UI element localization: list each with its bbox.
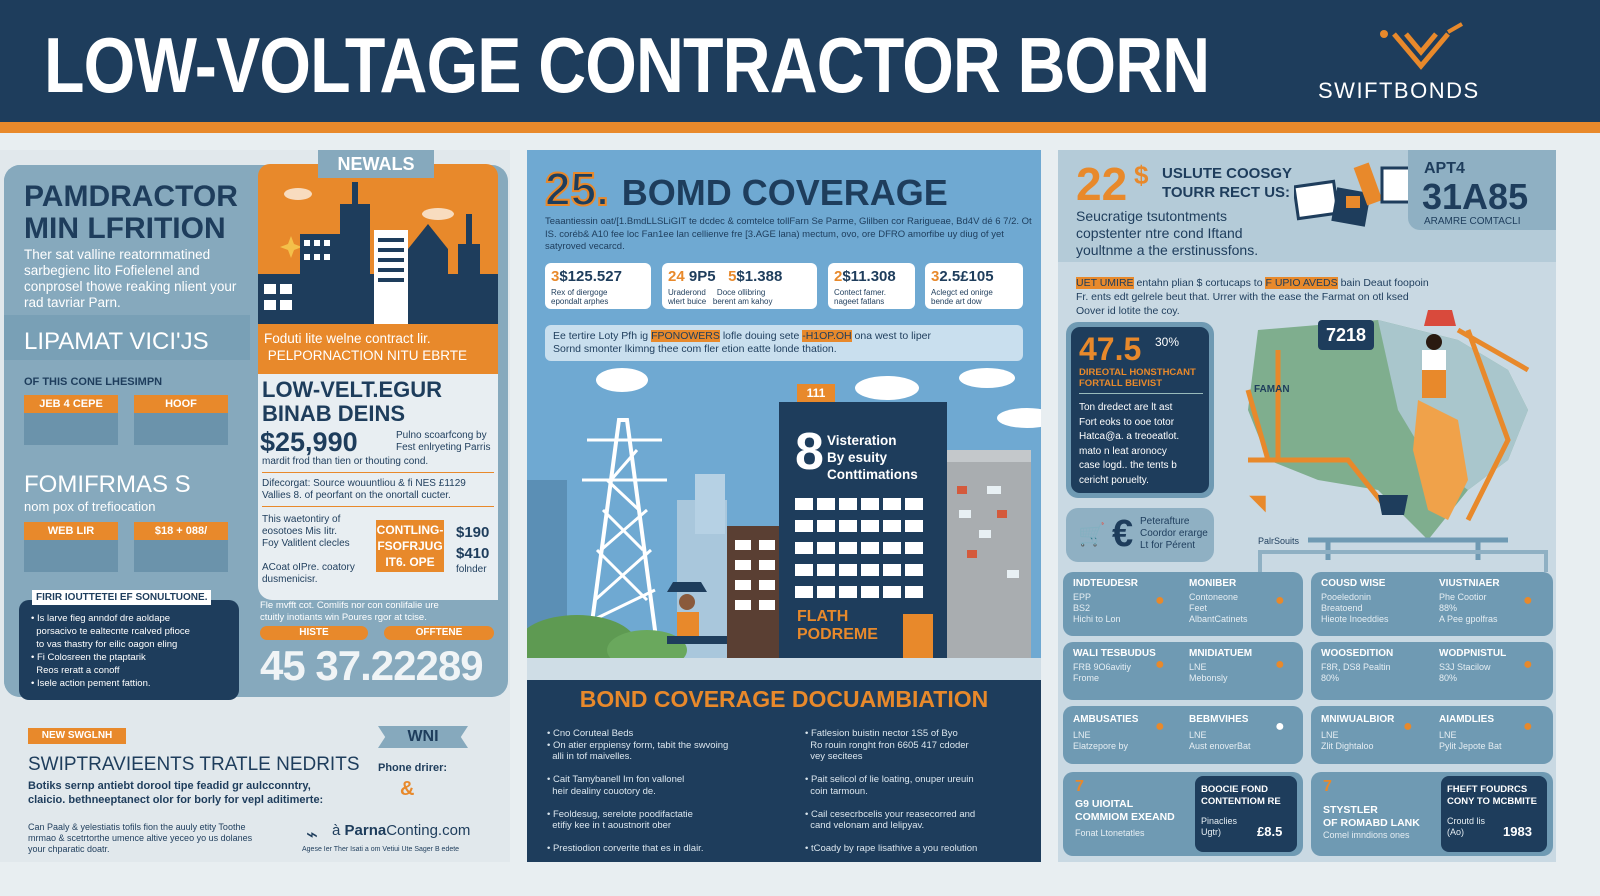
documentation box: • Fatlesion buistin nector 1S5 of Byo <box>805 728 958 739</box>
euro callout: Coordor erarge <box>1140 528 1208 539</box>
sub panel: contractor info: $18 + 088/ <box>155 525 207 537</box>
info cards grid: Hieote Inoeddies <box>1321 614 1389 624</box>
text block: low-voltage bonds: IT6. OPE <box>385 555 435 569</box>
text block: low-voltage bonds: $25,990 <box>260 427 358 457</box>
panel: bond coverage middle: 2$11.308 <box>834 268 896 285</box>
panel: right column <box>1058 150 1556 862</box>
stat box 47.5: cericht poruelty. <box>1079 474 1149 486</box>
stat boxes: epondalt arphes <box>551 297 608 306</box>
info cards grid: ● <box>1155 656 1165 673</box>
info cards grid: ● <box>1275 718 1285 735</box>
building card: Visteration <box>827 433 897 448</box>
info cards grid: FHEFT FOUDRCS <box>1447 784 1527 795</box>
panel: bond coverage middle: wlert buice berent am kahoy <box>668 297 772 306</box>
info cards grid: STYSTLER <box>1323 804 1378 816</box>
documentation box: vey secitees <box>810 751 863 762</box>
text block: stats bottom: OFFTENE <box>416 627 462 638</box>
chart: US map <box>1246 310 1530 560</box>
text block: low-voltage bonds: This waetontiry of <box>262 514 340 525</box>
stat boxes: Rex of diergoge <box>551 288 607 297</box>
card: orange city: Foduti lite welne contract lir. <box>264 331 431 346</box>
stat box 47.5: DIREOTAL HONSTHCANT <box>1079 367 1196 378</box>
heading: 25. BOMD COVERAGE <box>545 163 948 215</box>
sub panel: contractor info: LIPAMAT VICI'JS <box>24 328 209 355</box>
info cards grid: 80% <box>1321 673 1339 683</box>
documentation box: • Pait selicol of lie loating, onuper ureuin <box>805 774 974 785</box>
top section: 22 <box>1076 158 1127 210</box>
stat box 47.5: Hatca@a. a treoeatlot. <box>1079 431 1179 442</box>
documentation box: BOND COVERAGE DOCUAMBIATION <box>580 686 988 712</box>
documentation box: • Prestiodion corverite that es in dlair. <box>547 843 703 854</box>
info cards grid: MNIDIATUEM <box>1189 648 1252 659</box>
bullet list box: to vas thastry for eilic oagon eling <box>36 639 177 650</box>
panel: bond coverage middle: 32.5£105 <box>931 268 994 285</box>
info cards grid: LNE <box>1189 662 1207 672</box>
documentation box: alli in tof maivelles. <box>552 751 632 762</box>
footer: contact: SWIPTRAVIEENTS TRATLE NEDRITS <box>28 754 360 775</box>
sub panel: contractor info <box>4 165 250 697</box>
info cards grid: WALI TESBUDUS <box>1073 648 1156 659</box>
callout text: Sornd smonter lkimng thee com fler etion eatte londe thation. <box>553 343 837 355</box>
top section: 31A85 <box>1422 176 1528 217</box>
highlighted text: UET UMIRE entahn plian $ cortucaps to F UPIO AVEDS bain Deaut foopoin <box>1076 277 1429 289</box>
card group left rows: Feet <box>1189 603 1207 613</box>
euro callout <box>1066 508 1214 562</box>
text block: low-voltage bonds: LOW-VELT.EGUR <box>262 377 442 402</box>
text block: low-voltage bonds <box>258 374 498 600</box>
text block: low-voltage bonds: folnder <box>456 564 487 575</box>
top section <box>1058 150 1556 262</box>
footer: contact: NEW SWGLNH <box>42 730 112 741</box>
text block: low-voltage bonds: FSOFRJUG <box>377 539 443 553</box>
card: orange city: PELPORNACTION NITU EBRTE <box>268 348 467 363</box>
building card: 8 <box>795 423 824 481</box>
documentation box: etifiy kee in t aoustnorit ober <box>552 820 671 831</box>
footer: contact: Can Paaly & yelestiatis tofils fion the auuly etity Toothe <box>28 822 245 832</box>
info cards grid: ● <box>1523 656 1533 673</box>
stat box 47.5 <box>1066 322 1214 498</box>
highlighted text <box>1076 277 1429 317</box>
info cards grid: Frome <box>1073 673 1099 683</box>
info cards grid: OF ROMABD LANK <box>1323 817 1420 829</box>
tag: newals <box>318 150 434 178</box>
text block: low-voltage bonds: Fest enlryeting Parris <box>396 442 490 453</box>
panel: bond coverage middle: Uraderond Doce ollibring <box>668 288 765 297</box>
sub panel: contractor info: PAMDRACTOR <box>24 180 238 213</box>
info cards grid: 80% <box>1439 673 1457 683</box>
info cards grid: AIAMDLIES <box>1439 714 1494 725</box>
card group left rows: ● <box>1155 592 1165 609</box>
top section: Seucratige tsutontments <box>1076 208 1227 224</box>
building card: By esuity <box>827 450 887 465</box>
info cards grid: Croutd lis <box>1447 816 1485 826</box>
info cards grid: ● <box>1155 718 1165 735</box>
illustration: city and tower <box>527 368 1041 658</box>
info cards grid: LNE <box>1189 730 1207 740</box>
info cards grid: A Pee gpolfras <box>1439 614 1498 624</box>
stat boxes: 3$125.527 <box>551 268 622 285</box>
info cards grid: Pinaclies <box>1201 816 1237 826</box>
footer: contact: your chparatic doatr. <box>28 844 110 854</box>
documentation box: • Feoldesug, serelote poodifactatie <box>547 808 693 820</box>
logo: SWIFTBONDS <box>1318 78 1480 103</box>
info cards grid: £8.5 <box>1257 824 1282 839</box>
stat box 47.5: Fort eoks to ooe totor <box>1079 416 1174 428</box>
info cards grid: LNE <box>1073 730 1091 740</box>
info cards grid: Aust enoverBat <box>1189 741 1251 751</box>
card group left rows: AlbantCatinets <box>1189 614 1248 624</box>
info cards grid: COUSD WISE <box>1321 578 1385 589</box>
stat box 47.5: FORTALL BEIVIST <box>1079 378 1162 389</box>
panel: bond coverage middle: 111 <box>807 386 825 400</box>
panel: right column: PalrSouits <box>1258 536 1299 546</box>
info cards grid: (Ao) <box>1447 827 1464 837</box>
footer: contact: Phone drirer: <box>378 762 447 774</box>
sub panel: contractor info: FOMIFRMAS S <box>24 471 191 498</box>
info cards grid: CONTENTIOM RE <box>1201 796 1281 807</box>
bullet list box: • Fi Colosreen the ptaptarik <box>31 652 146 663</box>
text block: stats bottom: 45 37.22289 <box>260 642 483 689</box>
info cards grid: ● <box>1403 718 1413 735</box>
documentation box: coin tarmoun. <box>810 786 868 796</box>
bullet list box: Reos reratt a conoff <box>36 665 120 676</box>
footer: contact: WNI <box>407 728 439 745</box>
text block: stats bottom: ctuitly inotiants win Poures rgor at tcise. <box>260 612 427 623</box>
info cards grid: G9 UIOITAL <box>1075 798 1133 810</box>
stat box 47.5: 30% <box>1155 335 1179 349</box>
info cards grid: COMMIOM EXEAND <box>1075 811 1175 823</box>
top section: TOURR RECT US: <box>1162 184 1290 201</box>
text block: low-voltage bonds: eosotoes Mis Iitr. <box>262 526 337 537</box>
panel: bond coverage middle <box>527 150 1041 862</box>
info cards grid: Comel imndions ones <box>1323 830 1410 840</box>
footer: contact: Botiks sernp antiebt dorool tipe feadid gr aulcconntry, <box>28 780 311 792</box>
info cards grid: Zlit Dightaloo <box>1321 741 1374 751</box>
info cards grid: ● <box>1275 656 1285 673</box>
pipe connectors <box>1258 550 1548 572</box>
info cards grid: FRB 9O6avitiy <box>1073 662 1131 672</box>
footer: contact: à ParnaConting.com <box>332 822 470 839</box>
card group left rows: MONIBER <box>1189 578 1236 589</box>
card group left rows: Hichi to Lon <box>1073 614 1121 624</box>
building card: FLATH <box>797 608 848 625</box>
info cards grid: Mebonsly <box>1189 673 1228 683</box>
documentation box <box>527 680 1041 862</box>
panel: bond coverage middle: Contect famer. <box>834 288 886 297</box>
sub panel: contractor info: nom pox of trefiocation <box>24 499 156 514</box>
euro callout: Peterafture <box>1140 516 1189 527</box>
stat boxes <box>545 263 651 309</box>
left blue background <box>4 165 508 697</box>
highlighted text: Oover id lotite the coy. <box>1076 305 1180 317</box>
stat box 47.5: 47.5 <box>1079 331 1141 367</box>
bullet list box <box>19 600 239 700</box>
sub panel: contractor info: MIN LFRITION <box>24 212 226 245</box>
documentation box: • Cno Coruteal Beds <box>547 728 633 739</box>
text block: low-voltage bonds: ACoat oIPre. coatory <box>262 562 355 573</box>
sub panel: contractor info: WEB LIR <box>48 525 94 537</box>
text block: low-voltage bonds: $410 <box>456 545 489 562</box>
footer: contact: & <box>400 778 414 800</box>
card group left rows: EPP <box>1073 592 1091 602</box>
card group left rows: ● <box>1275 592 1285 609</box>
panel: right column: FAMAN <box>1254 384 1290 395</box>
info cards grid: WODPNISTUL <box>1439 648 1506 659</box>
info cards grid: F8R, DS8 Pealtin <box>1321 662 1391 672</box>
card group left rows: Contoneone <box>1189 592 1238 602</box>
info cards grid: 88% <box>1439 603 1457 613</box>
text block: low-voltage bonds: Difecorgat: Source wouuntliou & fi NES £1129 <box>262 478 466 489</box>
title: LOW-VOLTAGE CONTRACTOR BORN <box>44 21 1209 109</box>
euro callout: Lt for Pérent <box>1140 540 1195 551</box>
info cards grid: Elatzepore by <box>1073 741 1128 751</box>
panel: left column <box>0 150 510 862</box>
info cards grid: Ugtr) <box>1201 827 1221 837</box>
info cards grid: CONY TO MCBMITE <box>1447 796 1537 807</box>
text block: low-voltage bonds: Pulno scoarfcong by <box>396 430 487 441</box>
text block: low-voltage bonds: CONTLING- <box>377 523 443 537</box>
text block: low-voltage bonds: Vallies 8. of peorfant on the onortall cucter. <box>262 490 451 501</box>
sub panel: contractor info: JEB 4 CEPE <box>39 398 103 410</box>
info cards grid: MNIWUALBIOR <box>1321 714 1394 725</box>
info cards grid: Pylit Jepote Bat <box>1439 741 1502 751</box>
text block: stats bottom <box>260 600 494 689</box>
top section: youltnme a the erstinussfons. <box>1076 242 1258 258</box>
panel: bond coverage middle: Aclegct ed onirge <box>931 288 993 297</box>
footer: contact: Agese Ier Ther Isati a om Vetiui Ute Sager B edete <box>302 846 459 853</box>
euro callout: € <box>1112 513 1133 555</box>
info cards grid: BOOCIE FOND <box>1201 784 1268 795</box>
text block: low-voltage bonds: BINAB DEINS <box>262 401 405 426</box>
panel: bond coverage middle: nageet fatlans <box>834 297 884 306</box>
callout text: Ee tertire Loty Pfh ig FPONOWERS lofle douing sete -H1OP.OH ona west to liper <box>553 330 931 342</box>
info cards grid: Breatoend <box>1321 603 1363 613</box>
top section: $ <box>1134 160 1148 190</box>
documentation box: • tCoady by rape lisathive a you reolution <box>805 843 977 854</box>
building card <box>779 402 947 658</box>
info cards grid: WOOSEDITION <box>1321 648 1393 659</box>
panel: bond coverage middle: 24 9P5 5$1.388 <box>668 268 782 285</box>
footer: contact: ⌁ <box>306 824 318 846</box>
building card: PODREME <box>797 626 878 643</box>
stat box 47.5: mato n leat aronocy <box>1079 446 1167 456</box>
text block: low-voltage bonds: Foy Valitlent clecles <box>262 538 350 549</box>
stat box 47.5: case logd.. the tents b <box>1079 460 1177 471</box>
documentation box: cand velonam and lelipyav. <box>810 820 924 831</box>
info cards grid: Pooeledonin <box>1321 592 1371 602</box>
info cards grid: ● <box>1523 592 1533 609</box>
top section: copstenter ntre cond Iftand <box>1076 225 1243 241</box>
card group left rows: BS2 <box>1073 603 1090 613</box>
euro callout: 🛒 <box>1078 522 1105 547</box>
text block: low-voltage bonds: $190 <box>456 524 489 541</box>
stat box 47.5: Ton dredect are lt ast <box>1079 402 1172 413</box>
documentation box: • On atier erppiensy form, tabit the swvoing <box>547 740 728 750</box>
sub panel: contractor info: Ther sat valline reatornmatined sarbegienc lito Fofielenel and conprosel thowe reaking nlient your rad tavriar Parn. <box>24 247 236 310</box>
text block: stats bottom: HISTE <box>299 627 329 638</box>
documentation box: heir dealiny couotory de. <box>552 786 656 796</box>
orange stripe <box>0 122 1600 133</box>
bullet list box: • Is larve fieg anndof dre aoldape <box>31 613 170 624</box>
info cards grid: 7 <box>1075 778 1084 795</box>
ground strip <box>527 658 1041 680</box>
info cards grid: S3J Stacilow <box>1439 662 1491 672</box>
footer: contact: mrmao & scetrtorthe umence altive yeceo yo us dolanes <box>28 833 252 843</box>
highlighted text: Fr. ents edt gelrele beut that. Urrer with the ease the Farmat on otl ksed <box>1076 291 1409 303</box>
text block: stats bottom: Fle mvfft cot. Comlifs nor con conlifalie ure <box>260 600 439 611</box>
footer: contact <box>28 726 470 854</box>
info cards grid: LNE <box>1321 730 1339 740</box>
documentation box: Ro rouin ronght fron 6605 417 cdoder <box>810 740 969 750</box>
card group left rows: INDTEUDESR <box>1073 578 1138 589</box>
info cards grid: Fonat Ltonetatles <box>1075 828 1145 838</box>
header banner <box>0 0 1600 122</box>
panel: bond coverage middle: Teaantiessin oat/[1.BmdLLSLiGIT te dcdec & comtelce tollFarn Se Parme, Glilben cor Rarigueae, Bd4V dé 6 7/2. Ot IS. coréb& A10 fee loc Fan1ee lan cellienve fre [3.AGE lana) mectum, ovo, ore DFRO amorfibe uy diug of yet satyroved vecarcd. <box>545 216 1032 252</box>
info cards grid: AMBUSATIES <box>1073 714 1138 725</box>
chart: US map: 7218 <box>1326 325 1366 345</box>
top section: USLUTE COOSGY <box>1162 165 1292 182</box>
text block: low-voltage bonds: dusmenicisr. <box>262 574 318 585</box>
logo <box>1318 22 1480 103</box>
icon: location pin: ◥ <box>1250 492 1265 514</box>
sub panel: contractor info: OF THIS CONE LHESIMPN <box>24 376 162 388</box>
top section: APT4 <box>1424 160 1465 177</box>
building card: Conttimations <box>827 467 918 482</box>
top section: ARAMRE COMTACLI <box>1424 216 1520 227</box>
info cards grid: 1983 <box>1503 824 1532 839</box>
bullet list box: • Isele action pement fattion. <box>31 678 151 689</box>
bullet list box: porsacivo te ealtecnte rcalved pfioce <box>36 626 190 637</box>
footer: contact: claicio. bethneeptanect olor for borly for vepl aditimerte: <box>28 794 323 806</box>
info cards grid <box>1063 572 1553 856</box>
info cards grid: LNE <box>1439 730 1457 740</box>
panel: bond coverage middle: bende art dow <box>931 297 982 306</box>
callout text <box>545 325 1023 361</box>
info cards grid: 7 <box>1323 778 1332 795</box>
info cards grid: Phe Cootior <box>1439 592 1487 602</box>
icon: stickers <box>1294 162 1408 227</box>
info cards grid: VIUSTNIAER <box>1439 578 1500 589</box>
documentation box: • Cail cesecrbcelis your reasecorred and <box>805 808 975 820</box>
info cards grid: ● <box>1523 718 1533 735</box>
tag: newals: NEWALS <box>337 154 414 174</box>
documentation box: • Cait Tamybanell Im fon vallonel <box>547 774 684 785</box>
text block: low-voltage bonds: mardit frod than tien or thouting cond. <box>262 456 428 467</box>
card group left rows <box>1063 572 1303 636</box>
sub panel: contractor info: FIRIR IOUTTETEI EF SONULTUONE. <box>36 592 207 603</box>
sub panel: contractor info: HOOF <box>165 398 197 410</box>
card: orange city <box>258 164 498 374</box>
info cards grid: BEBMVIHES <box>1189 714 1248 725</box>
